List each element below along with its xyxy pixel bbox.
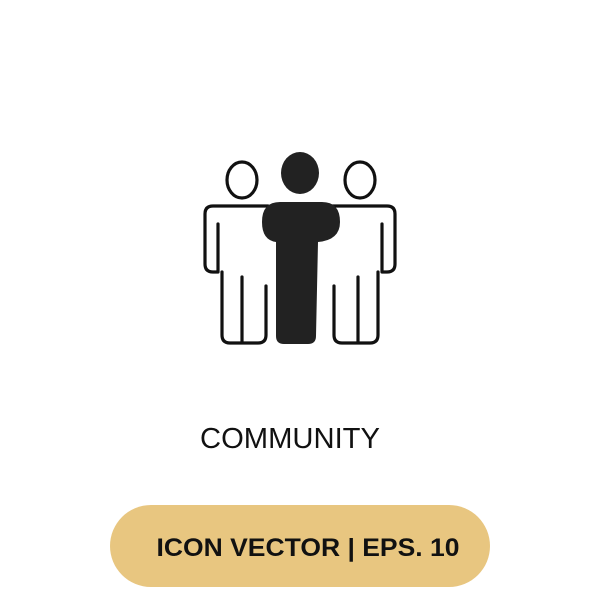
right person [332, 162, 395, 343]
badge: icon vector pill: ICON VECTOR | EPS. 10 [156, 534, 460, 562]
label: COMMUNITY: COMMUNITY [200, 423, 380, 455]
left person [205, 162, 268, 343]
icon: community people [205, 152, 395, 344]
center person [262, 152, 340, 344]
badge: icon vector pill [110, 505, 490, 587]
